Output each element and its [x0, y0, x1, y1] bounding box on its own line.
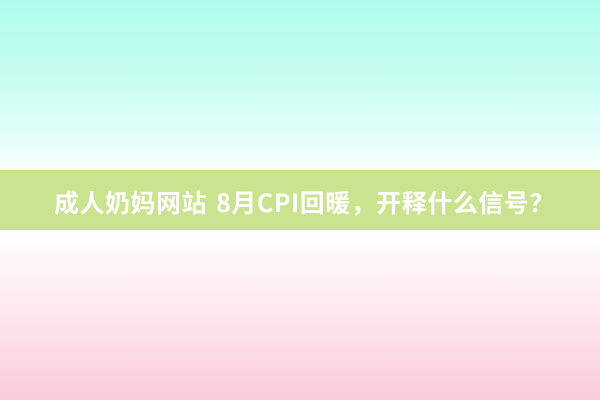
title: 成人奶妈网站 8月CPI回暖，开释什么信号？	[54, 184, 555, 220]
title band	[0, 170, 600, 230]
